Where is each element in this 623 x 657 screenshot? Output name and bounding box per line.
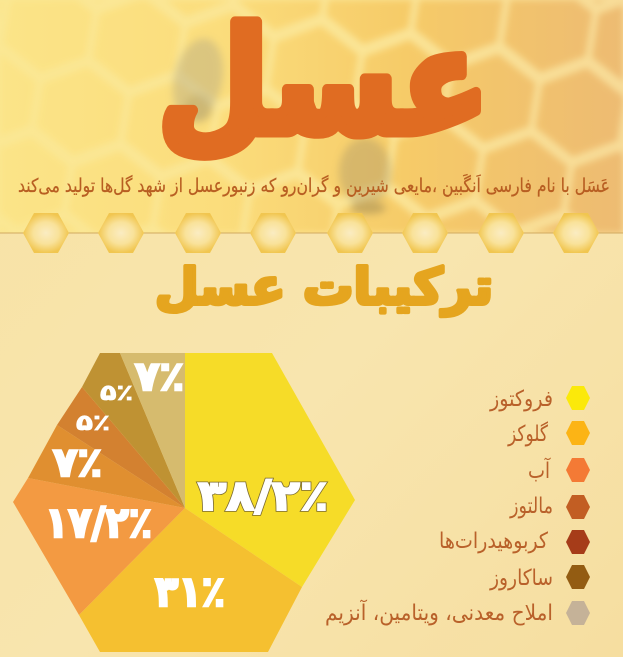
bee photo, upper [166,34,230,126]
legend item: sucrose: ساکاروز [489,566,553,591]
bee photo, lower [339,138,391,214]
legend item: maltose [509,494,590,519]
label: 17.2 percent: ۱۷/۲٪ [45,498,152,547]
slice: sucrose [82,353,185,508]
label: 5 percent: ۵٪ [76,411,110,436]
label: 38.2 percent: ۳۸/۲٪ [198,471,328,520]
legend item: minerals, vitamins, enzymes: املاح معدنی، ویتامین، آنزیم [325,599,553,626]
slice: carbohydrates [57,387,185,508]
label: 5 percent: ۵٪ [100,381,133,406]
legend item: glucose: گلوکز [507,421,548,447]
slice: fructose [185,353,355,587]
hexagon row divider [23,213,599,253]
legend item: fructose: فروکتوز [489,387,553,412]
slice: glucose [79,508,302,652]
legend item: water: آب [528,457,551,484]
title: عسل [158,0,489,167]
label: 7 percent: ۷٪ [53,440,102,486]
legend item: glucose [507,421,590,447]
label: 38.2 percent: ۳۸/۲٪ [198,471,328,520]
legend item: carbohydrates: کربوهیدرات‌ها [439,529,548,554]
slice: minerals [120,353,185,508]
slice: water [13,478,185,615]
legend item: maltose: مالتوز [509,494,553,519]
label: 7 percent: ۷٪ [135,354,184,400]
label: 31 percent: ۳۱٪ [155,567,225,616]
section heading: ترکیبات عسل [155,258,493,317]
legend item: water [528,457,590,484]
legend item: fructose [489,386,590,412]
slice: maltose [28,425,185,508]
hexagonal pie chart [13,353,355,652]
legend [325,386,590,626]
honeycomb header background [0,0,623,234]
